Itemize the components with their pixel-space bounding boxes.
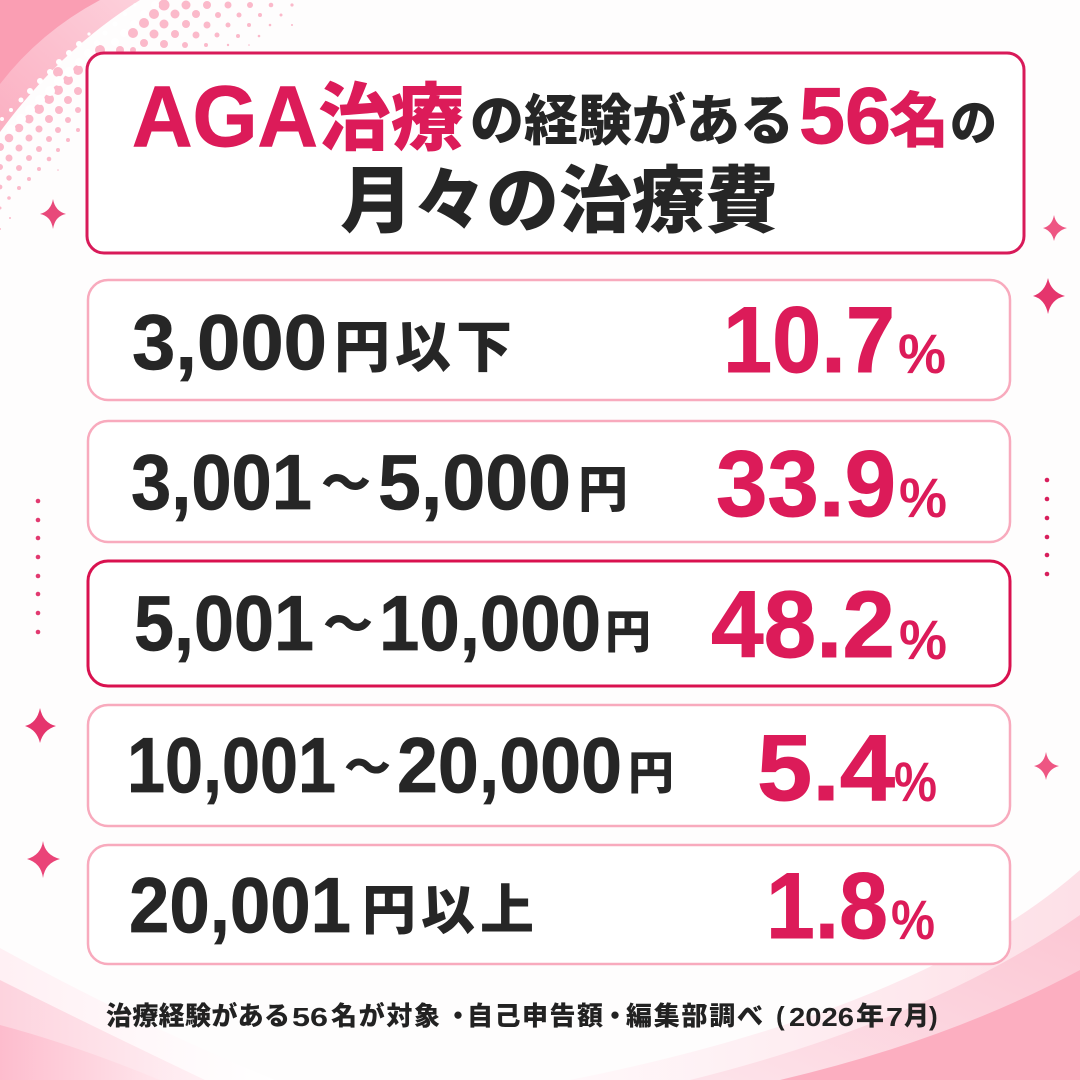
label: 〜 xyxy=(344,729,391,798)
panel: title xyxy=(87,53,1024,253)
footnote: 治療経験がある xyxy=(106,996,290,1033)
label: 〜 xyxy=(321,444,371,516)
icon: sparkle left middle xyxy=(25,708,56,743)
label: 10,000 xyxy=(379,579,601,667)
label xyxy=(134,579,651,667)
heading: line 1: の経験がある xyxy=(470,76,794,156)
icon: sparkle left top xyxy=(40,199,66,229)
label: 円以下 xyxy=(334,303,512,384)
label: 円以上 xyxy=(362,866,534,945)
background: top left arcs xyxy=(0,0,140,132)
heading: line 1 xyxy=(132,59,997,166)
label: 5,001 xyxy=(134,579,314,667)
dots: right column xyxy=(1045,478,1049,576)
label xyxy=(127,721,674,809)
dots: left column xyxy=(36,499,40,634)
value: 10.7 xyxy=(723,287,895,392)
icon: sparkle right lower xyxy=(1034,752,1059,780)
value: 1.8 xyxy=(766,853,888,958)
footnote: 56 xyxy=(292,1002,328,1032)
footnote: 名が対象 xyxy=(331,996,440,1033)
footnote: 2026 xyxy=(789,1002,854,1032)
panel: row 20,001円以上 xyxy=(88,845,1010,964)
footnote: 年 xyxy=(856,996,884,1033)
background: bottom right swoosh xyxy=(570,870,1080,1080)
background: white halftone dots xyxy=(0,1,159,134)
heading: line 1: 名 xyxy=(889,73,949,160)
label xyxy=(132,298,512,386)
value: 48.2 xyxy=(711,572,895,678)
background: halftone dots xyxy=(0,0,294,230)
footnote: 自己申告額 xyxy=(467,996,603,1033)
value: % xyxy=(894,750,937,813)
label: 〜 xyxy=(323,585,373,657)
footnote: 7 xyxy=(886,1002,903,1032)
panel: row 10,001〜20,000円 xyxy=(88,705,1010,826)
label xyxy=(131,438,628,526)
footnote: 月 xyxy=(904,996,929,1033)
icon: sparkle right top large xyxy=(1033,278,1065,314)
footnote: ・ xyxy=(602,996,628,1033)
value: % xyxy=(891,888,935,951)
heading: line 1: 治療 xyxy=(318,59,464,166)
label: 円 xyxy=(578,450,628,522)
label: 3,000 xyxy=(132,298,327,386)
heading: line 1: 56 xyxy=(799,71,891,160)
heading: line 2: 月々の治療費 xyxy=(340,142,778,248)
footnote: ( xyxy=(776,1001,785,1031)
value: 5.4 xyxy=(757,715,895,820)
heading: line 1: AGA xyxy=(132,69,318,165)
panel: row 3,000円以下 xyxy=(88,280,1010,400)
label: 3,001 xyxy=(131,438,312,526)
label: 20,001 xyxy=(129,861,351,949)
value: 33.9 xyxy=(716,431,896,536)
label: 円 xyxy=(628,737,674,803)
value: % xyxy=(899,466,947,529)
label: 5,000 xyxy=(378,438,571,526)
label: 20,000 xyxy=(397,721,622,809)
label: 円 xyxy=(605,596,651,662)
value: % xyxy=(899,608,947,671)
value: % xyxy=(898,322,946,385)
footnote: 編集部調べ xyxy=(626,996,763,1033)
icon: sparkle left lower xyxy=(27,841,60,878)
heading: line 1: の xyxy=(950,84,997,155)
label xyxy=(129,861,534,949)
background: bottom left swoosh xyxy=(0,948,275,1080)
panel: row 5,001〜10,000円 highlighted xyxy=(88,561,1010,686)
footnote: ・ xyxy=(445,996,471,1033)
footnote: ) xyxy=(929,1001,938,1031)
label: 10,001 xyxy=(127,721,336,809)
footnote xyxy=(106,996,938,1033)
icon: sparkle right top small xyxy=(1043,215,1067,241)
panel: row 3,001〜5,000円 xyxy=(88,421,1010,542)
